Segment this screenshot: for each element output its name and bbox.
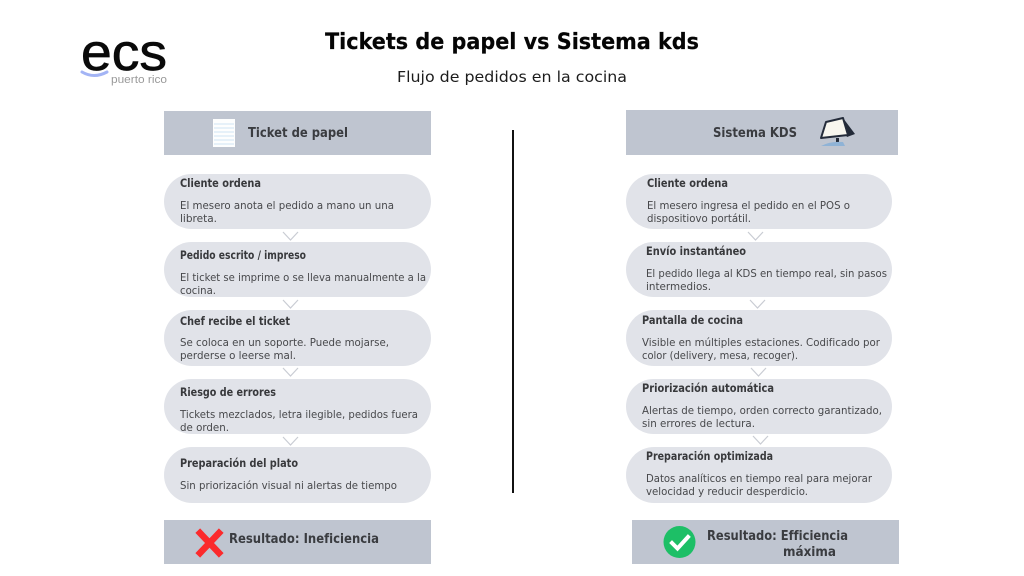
step: cliente ordena: Cliente ordena xyxy=(647,176,728,190)
step: cliente ordena: libreta. xyxy=(180,212,217,225)
step: pedido escrito: Pedido escrito / impreso xyxy=(180,248,306,262)
step: preparacion optimizada: Preparación optimizada xyxy=(646,449,773,463)
arrow xyxy=(751,368,766,376)
step: riesgo de errores: Riesgo de errores xyxy=(180,385,276,399)
logo: ecs puerto rico: puerto rico xyxy=(111,74,167,86)
panel: ticket de papel xyxy=(164,111,431,564)
step: envio instantaneo xyxy=(626,242,892,297)
icon: paper note xyxy=(213,119,235,147)
step: pedido escrito xyxy=(164,242,431,297)
step: cliente ordena: Cliente ordena xyxy=(180,176,261,190)
step: preparacion optimizada: velocidad y reducir desperdicio. xyxy=(646,485,808,498)
header: sistema kds: Sistema KDS xyxy=(713,125,797,141)
arrow xyxy=(753,436,768,444)
header: ticket de papel: Ticket de papel xyxy=(248,125,348,141)
step: preparacion del plato: Preparación del plato xyxy=(180,456,298,470)
arrow xyxy=(283,232,298,240)
step: envio instantaneo: intermedios. xyxy=(646,280,711,293)
step: priorizacion automatica xyxy=(626,379,892,434)
icon: kds monitor xyxy=(821,118,855,146)
step: preparacion optimizada xyxy=(626,447,892,503)
header: sistema kds xyxy=(626,110,898,155)
step: cliente ordena: El mesero ingresa el pedido en el POS o xyxy=(647,199,850,212)
panel: sistema kds xyxy=(626,110,899,564)
step: riesgo de errores: Tickets mezclados, letra ilegible, pedidos fuera xyxy=(179,408,418,421)
step: chef recibe xyxy=(164,310,431,366)
result: ineficiencia xyxy=(164,520,431,564)
step: riesgo de errores: de orden. xyxy=(180,421,229,434)
step: pedido escrito: El ticket se imprime o se lleva manualmente a la xyxy=(180,271,426,284)
step: pedido escrito: cocina. xyxy=(180,284,216,297)
step: cliente ordena xyxy=(626,174,892,229)
icon: red x xyxy=(200,533,219,553)
step: pantalla de cocina: color (delivery, mesa, recoger). xyxy=(642,349,798,362)
result: eficiencia maxima: máxima xyxy=(783,544,836,560)
step: pantalla de cocina: Pantalla de cocina xyxy=(642,313,743,327)
step: pantalla de cocina xyxy=(626,310,892,366)
header: ticket de papel xyxy=(164,111,431,155)
logo: ecs puerto rico: ecs xyxy=(81,24,167,82)
step: preparacion del plato xyxy=(164,447,431,503)
icon: green check xyxy=(664,526,696,558)
subtitle: Flujo de pedidos en la cocina xyxy=(397,68,627,86)
arrow xyxy=(748,232,763,240)
result: ineficiencia: Resultado: Ineficiencia xyxy=(229,531,379,547)
arrow xyxy=(283,368,298,376)
step: riesgo de errores xyxy=(164,379,431,434)
step: chef recibe: perderse o leerse mal. xyxy=(180,349,296,362)
title: Tickets de papel vs Sistema kds xyxy=(325,30,699,55)
step: preparacion del plato: Sin priorización visual ni alertas de tiempo xyxy=(180,479,397,492)
step: priorizacion automatica: Alertas de tiempo, orden correcto garantizado, xyxy=(642,404,882,417)
arrow xyxy=(750,300,765,308)
step: priorizacion automatica: sin errores de lectura. xyxy=(642,417,755,430)
step: cliente ordena: El mesero anota el pedido a mano un una xyxy=(180,199,394,212)
step: pantalla de cocina: Visible en múltiples estaciones. Codificado por xyxy=(642,336,880,349)
result: eficiencia maxima xyxy=(632,520,899,564)
step: chef recibe: Se coloca en un soporte. Puede mojarse, xyxy=(180,336,389,349)
step: priorizacion automatica: Priorización automática xyxy=(642,381,774,395)
step: chef recibe: Chef recibe el ticket xyxy=(180,314,290,328)
arrow xyxy=(283,437,298,445)
arrow xyxy=(283,300,298,308)
step: preparacion optimizada: Datos analíticos en tiempo real para mejorar xyxy=(646,472,872,485)
step: cliente ordena: dispositiovo portátil. xyxy=(647,212,751,225)
step: envio instantaneo: El pedido llega al KDS en tiempo real, sin pasos xyxy=(646,267,887,280)
step: envio instantaneo: Envío instantáneo xyxy=(646,244,746,258)
step: cliente ordena xyxy=(164,174,431,229)
result: eficiencia maxima: Resultado: Efficiencia xyxy=(707,528,848,544)
divider xyxy=(512,130,514,493)
